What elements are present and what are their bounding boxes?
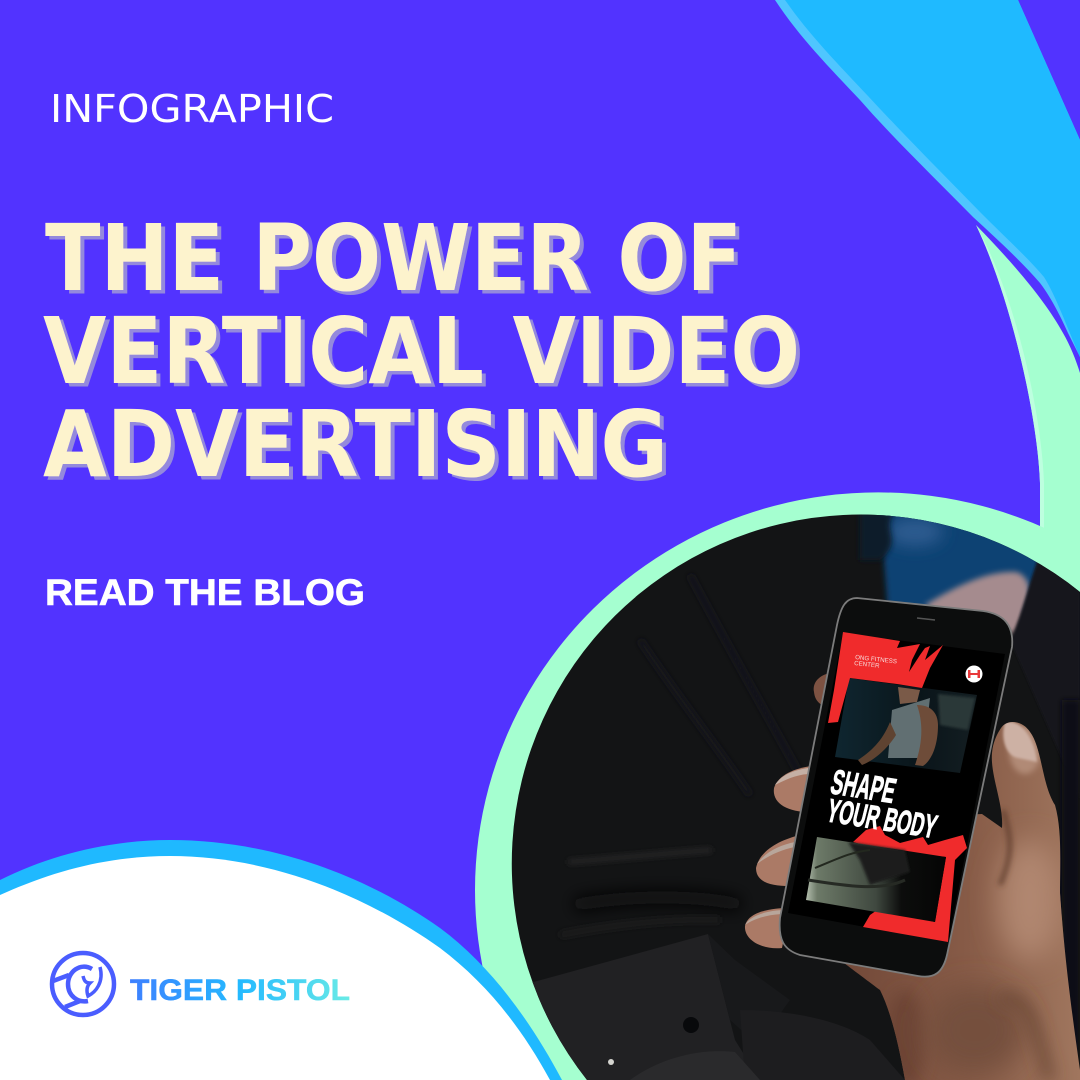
poster background [788,633,1005,942]
title: VERTICAL VIDEO [43,298,800,405]
eyebrow label: INFOGRAPHIC [50,87,334,131]
shirt button [683,1017,699,1033]
bottom-left white panel [0,856,550,1080]
red brush shapes top [828,632,943,723]
phone body [780,598,1012,977]
logo wordmark: TIGER PISTOL [130,974,350,1007]
poster headline: SHAPE [827,763,900,811]
fingers [745,673,830,948]
logo mark [52,953,114,1015]
decorative wave: right mint [976,225,1080,620]
red brush shapes bottom [853,826,967,942]
poster small label: ONG FITNESS [855,654,897,665]
circular photo: hand holding phone [505,510,1080,1080]
bench photo [806,837,946,922]
poster headline [829,770,940,838]
smartphone [780,598,1012,977]
dumbbell icon [966,666,982,682]
poster headline: YOUR BODY [823,793,941,846]
poster small label: CENTER [854,660,880,670]
shirt rivet [608,1059,614,1065]
earpiece [917,618,935,620]
gym photo [835,678,977,773]
shirt background [505,510,1080,1080]
title: THE POWER OF [45,205,742,312]
bottom-left cyan band [0,840,562,1080]
title: ADVERTISING [43,391,668,498]
title [43,205,800,498]
logo: Tiger Pistol [52,953,350,1015]
mint ring around photo [475,492,1080,1080]
hand: palm and thumb [845,722,1080,1080]
call to action: READ THE BLOG [45,572,365,613]
decorative wave: top right cyan [775,0,1080,357]
